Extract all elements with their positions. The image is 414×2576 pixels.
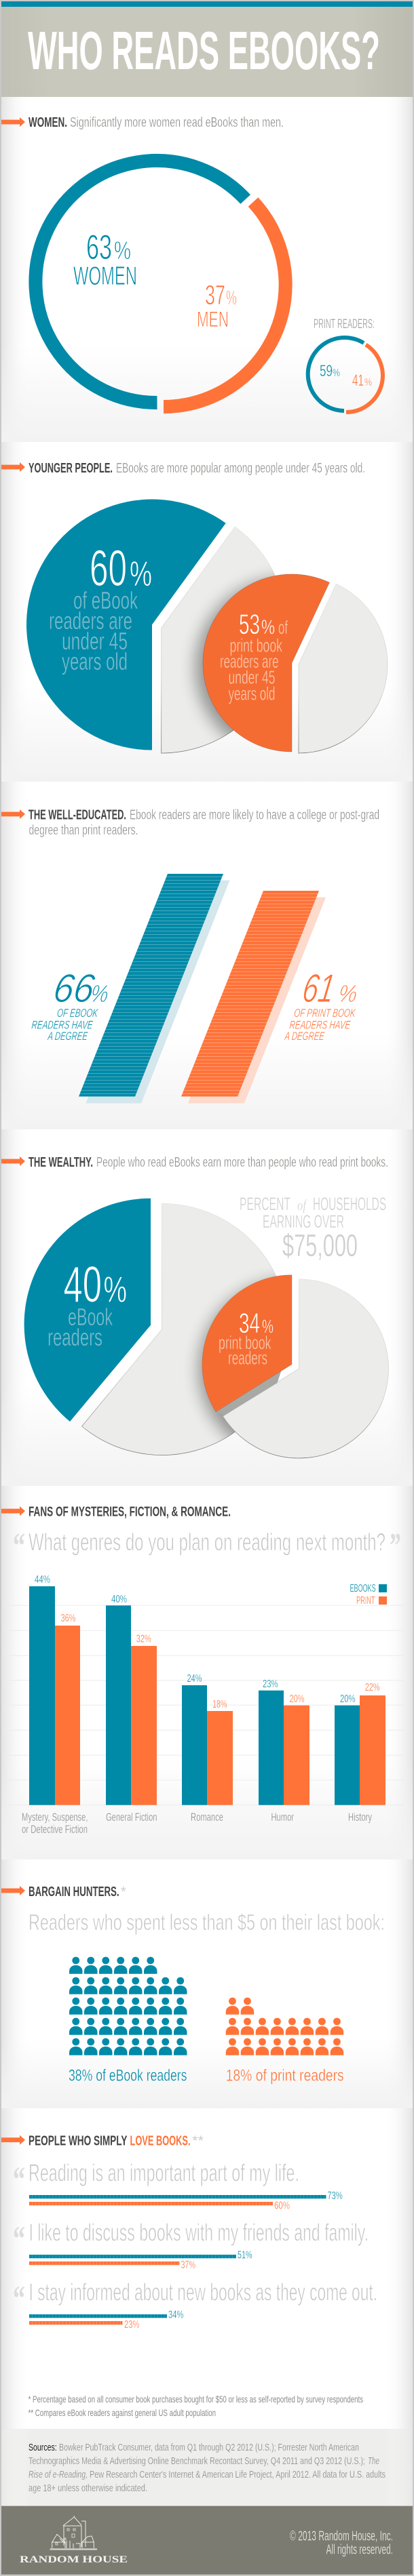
label: 66% of ebook readers bbox=[31, 965, 111, 1043]
chart: print readers gender ring: % bbox=[333, 367, 340, 379]
statement: discuss books: 37% bbox=[181, 2259, 195, 2271]
bars: general fiction: 32% bbox=[136, 1634, 151, 1645]
label: 61% of print readers: % bbox=[337, 980, 360, 1007]
statement: discuss books bbox=[13, 2218, 369, 2271]
statement: discuss books: 51% bbox=[238, 2250, 252, 2261]
legend: EBOOKS bbox=[350, 1583, 376, 1594]
label: 34% print book readers: readers bbox=[228, 1348, 267, 1369]
heading: younger people bbox=[29, 461, 365, 476]
heading: women: WOMEN. bbox=[29, 115, 67, 130]
heading: well-educated: THE WELL-EDUCATED. bbox=[29, 808, 126, 823]
label: 34% print book readers: % bbox=[262, 1316, 274, 1337]
sources text: Sources: bbox=[29, 2442, 57, 2453]
bars: humor: 23% bbox=[263, 1678, 278, 1690]
sources text: age 18+ unless otherwise indicated. bbox=[29, 2482, 147, 2494]
header banner bbox=[1, 1, 413, 97]
label: 40% ebook readers bbox=[48, 1256, 127, 1351]
panel: bargain hunters bbox=[1, 1859, 413, 2108]
heading: women bbox=[29, 115, 284, 130]
heading: fans: FANS OF MYSTERIES, FICTION, & ROMANCE. bbox=[29, 1505, 231, 1520]
label: 53% of print readers: 53 bbox=[239, 608, 260, 640]
heading: bargain: BARGAIN HUNTERS. bbox=[29, 1885, 119, 1899]
bars: mystery: 36% bbox=[61, 1613, 76, 1624]
label: 60% of ebook readers: 60 bbox=[90, 540, 127, 597]
label: 63% women: 63 bbox=[86, 228, 112, 266]
label: 61% of print readers: 61 bbox=[299, 965, 338, 1011]
pictogram: print readers bbox=[226, 1998, 343, 2055]
sources text: The bbox=[368, 2455, 379, 2467]
label: 60% of ebook readers bbox=[49, 540, 152, 675]
panel: younger people bbox=[1, 442, 413, 782]
axis labels: or Detective Fiction bbox=[22, 1823, 88, 1836]
bars: humor: 20% bbox=[289, 1693, 304, 1705]
panel: women bbox=[1, 97, 413, 442]
label: 34% print book readers: 34 bbox=[239, 1307, 260, 1339]
bars: romance: 18% bbox=[212, 1699, 227, 1710]
heading: wealthy: THE WEALTHY. bbox=[29, 1155, 93, 1170]
arrow: women bbox=[1, 117, 25, 127]
axis labels: History bbox=[348, 1811, 372, 1824]
footnotes bbox=[29, 2394, 363, 2418]
chart: ebook households pie bbox=[24, 1199, 281, 1455]
label: 37% men: % bbox=[226, 287, 237, 309]
label: 61% of print readers: OF PRINT BOOK bbox=[293, 1007, 356, 1020]
arrow: wealthy bbox=[1, 1156, 25, 1166]
label: percent of households earning over $75,000: of bbox=[297, 1196, 307, 1213]
label: 66% of ebook readers: OF EBOOK bbox=[56, 1007, 99, 1020]
label: 34% print book readers: print book bbox=[219, 1332, 271, 1353]
chart: print readers gender ring: 59 bbox=[320, 362, 333, 380]
sources text: Rise of e-Reading, bbox=[29, 2469, 88, 2480]
chart: print households pie bbox=[202, 1275, 388, 1458]
question: what genres bbox=[13, 1527, 401, 1565]
axis labels: Romance bbox=[191, 1811, 223, 1824]
bars: romance bbox=[182, 1673, 233, 1805]
heading: younger people: YOUNGER PEOPLE. bbox=[29, 461, 113, 476]
statement: discuss books: “ bbox=[13, 2219, 25, 2259]
chart: ebook readers gender ring bbox=[35, 161, 286, 407]
label: 63% women bbox=[73, 228, 137, 291]
heading: well-educated: degree than print readers. bbox=[29, 823, 138, 838]
arrow: bargain bbox=[1, 1886, 25, 1895]
bars: general fiction: 40% bbox=[111, 1594, 127, 1605]
panel: footer bbox=[1, 2506, 413, 2575]
label: 53% of print readers: under 45 bbox=[228, 667, 276, 688]
bars: history: 20% bbox=[340, 1693, 356, 1705]
bars: general fiction bbox=[106, 1594, 157, 1805]
statement: reading is important: “ bbox=[13, 2160, 25, 2199]
chart: ebook degree bar bbox=[79, 874, 229, 1104]
label: 61% of print readers: READERS HAVE bbox=[289, 1019, 352, 1031]
label: 53% of print readers bbox=[220, 608, 288, 704]
label: 53% of print readers: of bbox=[278, 617, 288, 638]
copyright bbox=[290, 2529, 393, 2557]
bars: mystery: 44% bbox=[35, 1574, 50, 1586]
heading: love books: LOVE BOOKS. bbox=[130, 2133, 190, 2148]
label: 40% ebook readers: % bbox=[103, 1270, 127, 1310]
label: 66% of ebook readers: READERS HAVE bbox=[31, 1019, 94, 1031]
statement: stay informed: 34% bbox=[168, 2310, 183, 2321]
chart: print readers gender ring: 41 bbox=[352, 371, 364, 390]
chart: print readers under 45 pie bbox=[203, 574, 388, 753]
axis labels bbox=[22, 1811, 372, 1836]
label: 40% ebook readers: 40 bbox=[64, 1256, 102, 1313]
label: 66% of ebook readers: A DEGREE bbox=[47, 1030, 88, 1043]
footnotes: ** Compares eBook readers against general US adult population bbox=[29, 2407, 216, 2418]
heading: well-educated bbox=[29, 808, 379, 838]
arrow: younger people bbox=[1, 462, 25, 472]
heading: women: Significantly more women read eBooks than men. bbox=[70, 115, 284, 130]
statement: stay informed: 23% bbox=[124, 2319, 139, 2331]
label: 37% men bbox=[197, 279, 237, 331]
label: 60% of ebook readers: years old bbox=[62, 647, 128, 675]
legend bbox=[350, 1583, 387, 1607]
label: 53% of print readers: readers are bbox=[220, 651, 278, 672]
bars: history: 22% bbox=[365, 1682, 380, 1693]
pictogram: ebook readers bbox=[69, 1957, 187, 2055]
chart: print readers gender ring: % bbox=[364, 377, 372, 388]
arrow: fans bbox=[1, 1506, 25, 1516]
panel: sources bbox=[1, 2429, 413, 2506]
label: percent of households earning over $75,000: $75,000 bbox=[282, 1228, 358, 1263]
label: 34% print book readers bbox=[219, 1307, 274, 1369]
label: 53% of print readers: print book bbox=[229, 635, 283, 656]
label: 60% of ebook readers: % bbox=[130, 555, 152, 594]
arrow: love books bbox=[1, 2135, 25, 2145]
heading: love books: ** bbox=[192, 2133, 204, 2148]
bars: humor bbox=[259, 1678, 309, 1805]
arrow: well-educated bbox=[1, 809, 25, 819]
label: 40% ebook readers: eBook bbox=[68, 1303, 113, 1331]
chart: ebook readers under 45 pie bbox=[26, 499, 276, 754]
sources text bbox=[29, 2442, 385, 2494]
label: 66% of ebook readers: % bbox=[89, 980, 111, 1007]
bars: history bbox=[335, 1682, 385, 1805]
label: percent of households earning over $75,000: EARNING OVER bbox=[263, 1211, 344, 1232]
label: 60% of ebook readers: readers are bbox=[49, 607, 132, 635]
label: 66% of ebook readers: 66 bbox=[50, 965, 98, 1011]
statement: stay informed: “ bbox=[13, 2279, 25, 2318]
label: 40% ebook readers: readers bbox=[48, 1323, 102, 1351]
label: 37% men: 37 bbox=[205, 279, 225, 310]
label: 60% of ebook readers: under 45 bbox=[62, 627, 128, 655]
axis labels: Mystery, Suspense, bbox=[22, 1811, 88, 1824]
caption: 18% of print readers: 18% of print readers bbox=[226, 2066, 344, 2085]
bar chart: genres bbox=[22, 1574, 385, 1836]
statement: reading is important: 73% bbox=[327, 2190, 343, 2202]
label: 37% men: MEN bbox=[197, 307, 229, 331]
label: 63% women: WOMEN bbox=[73, 262, 137, 291]
bars: mystery bbox=[29, 1574, 80, 1805]
label: 61% of print readers bbox=[284, 965, 360, 1043]
chart: print readers gender ring bbox=[308, 338, 383, 412]
heading: bargain: * bbox=[121, 1885, 126, 1899]
label: percent of households earning over $75,000 bbox=[240, 1194, 386, 1263]
label: 53% of print readers: years old bbox=[228, 683, 276, 704]
axis labels: Humor bbox=[271, 1811, 294, 1824]
statement: stay informed bbox=[13, 2278, 377, 2331]
axis labels: General Fiction bbox=[106, 1811, 157, 1824]
bars: romance: 24% bbox=[187, 1673, 202, 1685]
label: 60% of ebook readers: of eBook bbox=[73, 586, 138, 614]
legend: PRINT bbox=[356, 1595, 375, 1607]
panel: the well-educated bbox=[1, 782, 413, 1129]
logo: random house bbox=[20, 2516, 128, 2565]
question: what genres: ” bbox=[390, 1527, 401, 1565]
statement: reading is important bbox=[13, 2158, 343, 2211]
label: 63% women: % bbox=[114, 237, 131, 265]
label: 53% of print readers: % bbox=[261, 616, 275, 639]
panel: people who simply love books bbox=[1, 2108, 413, 2429]
panel: the wealthy bbox=[1, 1129, 413, 1486]
icon: house bbox=[50, 2516, 97, 2549]
statement: reading is important: 60% bbox=[274, 2200, 290, 2211]
heading: love books: PEOPLE WHO SIMPLY bbox=[29, 2133, 128, 2148]
caption: 38% of ebook readers: 38% of eBook readers bbox=[69, 2066, 187, 2085]
panel: fans of mysteries, fiction and romance bbox=[1, 1486, 413, 1859]
chart: print degree bar bbox=[181, 891, 326, 1104]
question: what genres: “ bbox=[13, 1527, 25, 1565]
label: 61% of print readers: A DEGREE bbox=[284, 1030, 325, 1043]
label: percent of households earning over $75,000: PERCENT bbox=[240, 1194, 290, 1214]
logo wordmark: RANDOM HOUSE bbox=[20, 2554, 128, 2565]
